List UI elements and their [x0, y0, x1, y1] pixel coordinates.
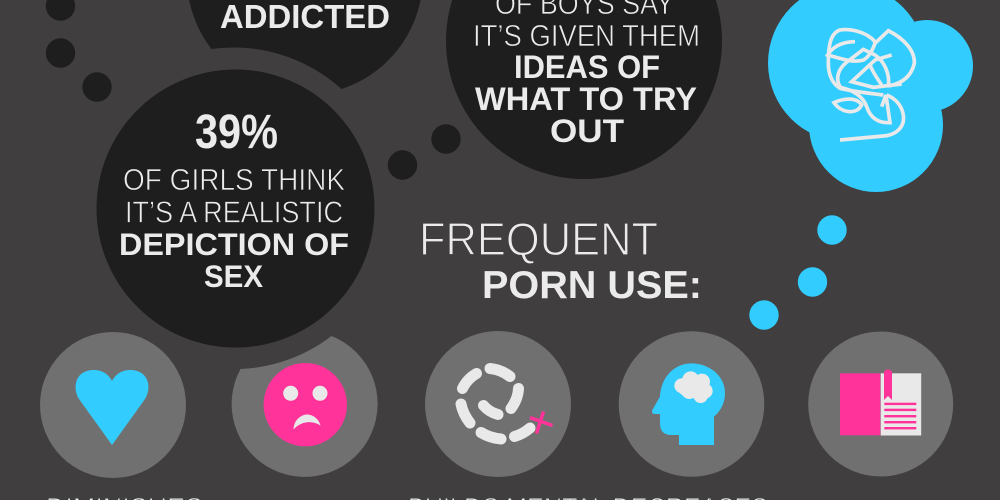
icon: heart [40, 332, 186, 478]
text: girls description [119, 162, 349, 294]
text: boys description [473, 0, 700, 149]
heading: frequent porn use [419, 213, 702, 307]
icon: book [808, 332, 953, 476]
icon: sad face [232, 336, 378, 477]
text: boys description: IDEAS OF [514, 49, 660, 85]
statistic: 39%: 39% [195, 106, 278, 159]
text: boys description: WHAT TO TRY [475, 81, 697, 117]
text: girls description: OF GIRLS THINK [123, 162, 345, 197]
text: girls description: SEX [204, 258, 263, 294]
text: boys description: OUT [550, 113, 624, 149]
speech bubble: addicted [187, 0, 423, 89]
icon: dashed circle with cross [425, 331, 571, 477]
thought dots: centre [388, 124, 461, 180]
text: girls description: DEPICTION OF [119, 226, 349, 262]
heading: frequent porn use: FREQUENT [419, 213, 658, 265]
thought bubble: 39% of girls [96, 70, 374, 348]
thought dots: blue [749, 215, 847, 330]
icon: head with brain [619, 331, 764, 477]
blue cloud with rose icon [768, 0, 973, 192]
heading: frequent porn use: PORN USE: [482, 264, 702, 307]
thought bubble: boys [446, 0, 722, 179]
text: girls description: IT’S A REALISTIC [125, 194, 343, 230]
thought dots: left [46, 0, 112, 102]
icon: rose [828, 30, 914, 140]
text: boys description: IT’S GIVEN THEM [473, 18, 700, 53]
